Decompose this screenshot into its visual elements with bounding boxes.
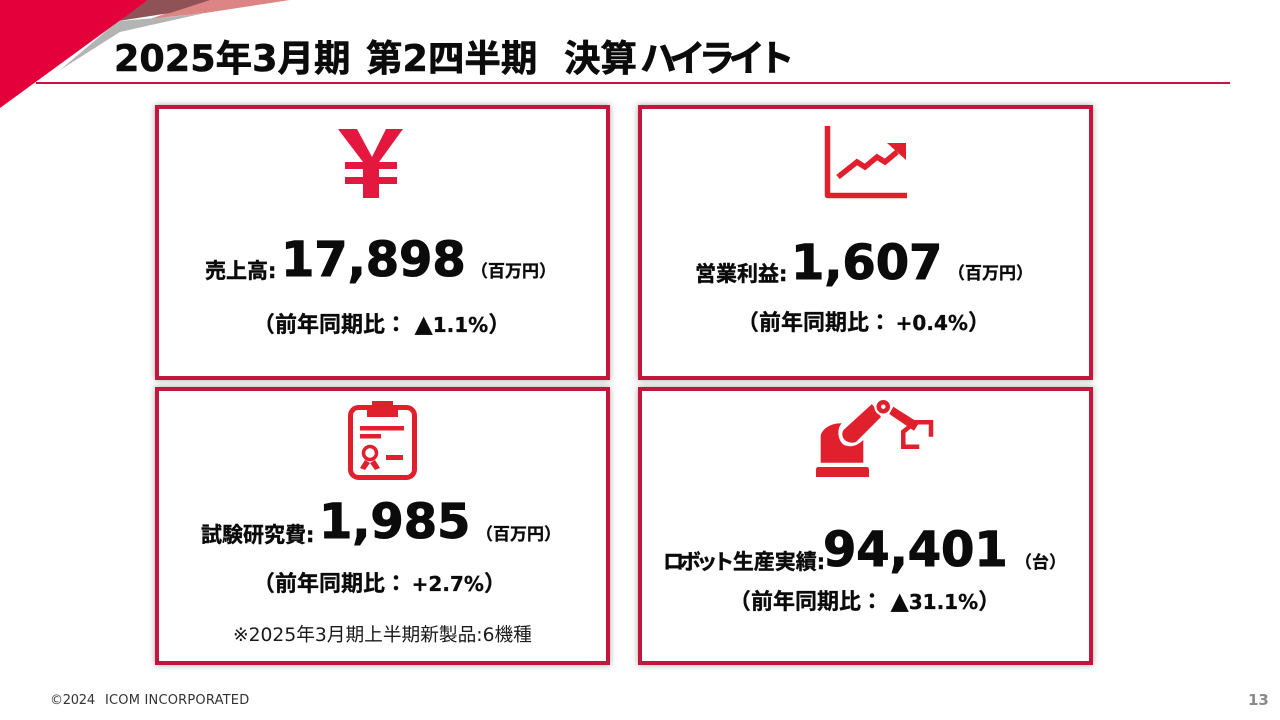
corner decoration	[0, 0, 290, 108]
panel: sales	[155, 105, 610, 380]
R&D label: 試験研究費:	[201, 523, 314, 547]
title: ハイライト	[640, 37, 788, 80]
panel: robot production	[638, 387, 1093, 665]
R&D year-on-year: （前年同期比： +2.7%）	[253, 572, 506, 597]
icon: robot arm	[816, 400, 934, 477]
operating profit label: 営業利益:	[695, 262, 787, 286]
icon: rising chart	[824, 126, 907, 198]
operating profit value: 1,607	[791, 235, 942, 291]
R&D unit: （百万円）	[476, 525, 561, 545]
robot production label: ロボット生産実績:	[663, 550, 825, 574]
title rule	[36, 82, 1230, 84]
robot production value: 94,401	[823, 522, 1008, 578]
operating profit unit: （百万円）	[948, 264, 1033, 284]
title: 決算	[564, 37, 637, 80]
robot production unit: （台）	[1015, 553, 1066, 573]
footer copyright: ©2024	[50, 693, 95, 708]
R&D value: 1,985	[319, 494, 470, 550]
sales value: 17,898	[281, 232, 466, 288]
R&D note: ※2025年3月期上半期新製品:6機種	[233, 625, 532, 646]
sales unit: （百万円）	[471, 262, 556, 282]
title: 2025年3月期	[114, 37, 350, 80]
title	[114, 37, 790, 80]
footer copyright: ICOM INCORPORATED	[105, 693, 249, 708]
sales year-on-year: （前年同期比： ▲1.1%）	[253, 310, 510, 338]
robot production year-on-year: （前年同期比： ▲31.1%）	[729, 587, 1000, 615]
panel: R&D	[155, 387, 610, 665]
operating profit year-on-year: （前年同期比： +0.4%）	[737, 311, 990, 336]
page number: 13	[1248, 691, 1269, 709]
icon: clipboard certificate	[348, 401, 417, 480]
title: 第2四半期	[366, 37, 537, 80]
sales label: 売上高:	[205, 259, 276, 283]
panel: operating profit	[638, 105, 1093, 380]
icon: yen	[338, 129, 403, 198]
